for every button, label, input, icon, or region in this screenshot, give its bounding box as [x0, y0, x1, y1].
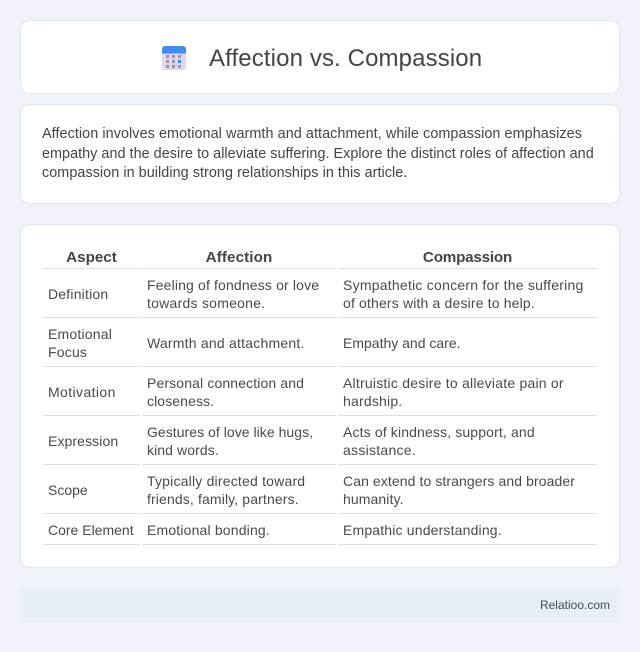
row: Scope: friends, family, partners. [147, 491, 299, 507]
row: Scope: humanity. [343, 491, 404, 507]
row: Core Element: Empathic understanding. [343, 522, 502, 538]
row: Definition: towards someone. [147, 295, 265, 311]
row: Definition: Definition [48, 286, 108, 302]
intro text: compassion in building strong relationships in this article. [42, 165, 407, 181]
row: Scope: Typically directed toward [147, 473, 305, 489]
row: Motivation: hardship. [343, 393, 402, 409]
panel: comparison table [20, 224, 620, 568]
panel: header [20, 20, 620, 94]
row: Expression: Gestures of love like hugs, [147, 424, 313, 440]
row: Emotional Focus: Focus [48, 344, 87, 360]
row: Expression: Expression [48, 433, 118, 449]
row: Core Element: Emotional bonding. [147, 522, 270, 538]
row: Emotional Focus: Warmth and attachment. [147, 335, 305, 351]
row: Definition [48, 277, 584, 311]
row: Core Element: Core Element [48, 522, 134, 538]
row: Expression: kind words. [147, 442, 219, 458]
row: Motivation: Personal connection and [147, 375, 304, 391]
row: Core Element [48, 522, 502, 538]
intro text: empathy and the desire to alleviate suffering. Explore the distinct roles of affection and [42, 146, 594, 162]
row: Scope [48, 473, 575, 507]
icon: calendar [162, 46, 186, 70]
footer bar [20, 588, 620, 622]
panel: introduction [20, 104, 620, 204]
footer credit: Relatioo.com [540, 598, 610, 612]
row: Scope: Can extend to strangers and broader [343, 473, 575, 489]
row: Motivation: Altruistic desire to alleviate pain or [343, 375, 564, 391]
row: Motivation [48, 375, 564, 409]
row: Definition: of others with a desire to help. [343, 295, 535, 311]
row: Definition: Sympathetic concern for the suffering [343, 277, 584, 293]
title: Affection vs. Compassion [209, 45, 482, 72]
row: Definition: Feeling of fondness or love [147, 277, 319, 293]
row: Expression: assistance. [343, 442, 416, 458]
row: Expression [48, 424, 535, 458]
row: Expression: Acts of kindness, support, and [343, 424, 535, 440]
table header: Affection: Affection [206, 249, 272, 266]
row: Emotional Focus [48, 326, 461, 360]
table header: Aspect: Aspect [66, 249, 117, 266]
row: Scope: Scope [48, 482, 88, 498]
table header: Compassion: Compassion [423, 249, 512, 266]
intro text: Affection involves emotional warmth and attachment, while compassion emphasizes [42, 126, 582, 142]
row: Motivation: closeness. [147, 393, 214, 409]
row: Emotional Focus: Emotional [48, 326, 112, 342]
intro text [42, 126, 594, 181]
row: Motivation: Motivation [48, 384, 116, 400]
row: Emotional Focus: Empathy and care. [343, 335, 461, 351]
